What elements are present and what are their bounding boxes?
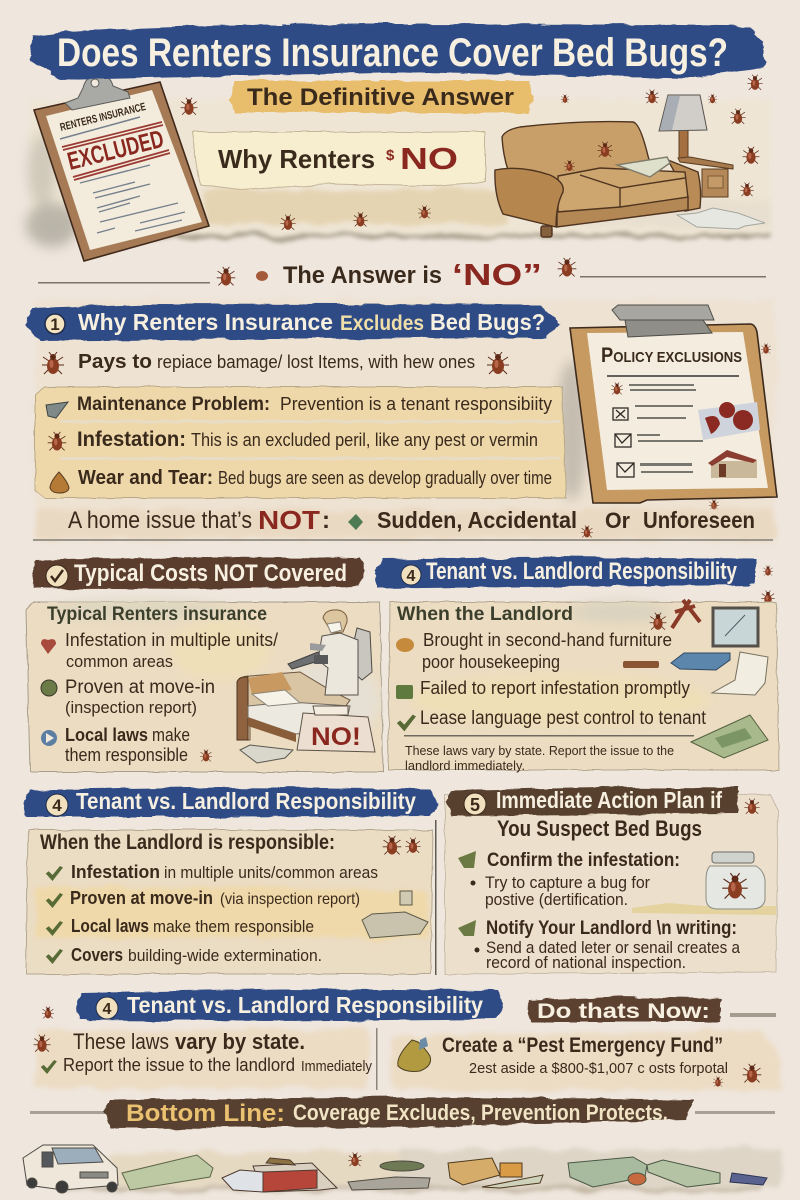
icon: tools — [348, 1161, 430, 1190]
highlight band — [36, 888, 428, 938]
illustration: bed — [237, 672, 350, 742]
banner: tenant vs landlord middle: Tenant vs. Landlord Responsibility — [76, 788, 416, 814]
banner: immediate action plan: 5 — [470, 795, 480, 815]
panel washes — [50, 601, 380, 740]
subtitle ribbon: The Definitive Answer — [247, 84, 514, 111]
section: typical costs not covered — [26, 557, 383, 772]
panel: when the landlord is responsible — [26, 830, 433, 974]
banner: immediate action plan: Immediate Action Plan if — [496, 787, 722, 813]
grey wall stain — [26, 134, 78, 247]
icon: van — [23, 1145, 118, 1193]
panel: state laws: Report the issue to the landlord — [63, 1055, 295, 1075]
section 5: immediate action plan — [445, 787, 778, 974]
item: second-hand furniture: Brought in second-hand furniture — [423, 630, 672, 650]
panel: pest emergency fund: 2est aside a $800-$1,007 c osts forpotal — [469, 1060, 728, 1077]
panel heading: When the Landlord is responsible: — [40, 831, 335, 854]
not sudden row: A home issue that’s — [68, 507, 252, 534]
panel: typical renters insurance: Typical Renters insurance — [47, 604, 267, 625]
row: infestation: This is an excluded peril, like any pest or vermin — [191, 430, 538, 450]
item: multiple units: common areas — [66, 652, 173, 671]
illustration: crumpled cloth — [677, 208, 765, 229]
banner: typical costs: Typical Costs NOT Covered — [74, 560, 347, 587]
exclusion reasons panel — [35, 387, 566, 498]
icon: tools and bug — [650, 600, 700, 630]
step: notify: record of national inspection. — [486, 953, 686, 972]
clipboard: excluded: EXCLUDED — [65, 125, 167, 176]
strip wash — [60, 1150, 780, 1191]
row: maintenance problem: Prevention is a tenant responsibiity — [280, 394, 552, 414]
banner: why renters: $ — [386, 147, 395, 164]
panel: state laws: vary by state. — [175, 1029, 305, 1054]
not sudden row: Unforeseen — [643, 507, 755, 533]
item: local laws: Local laws — [65, 725, 148, 745]
illustration: jar with bug — [632, 852, 776, 915]
item: second-hand furniture — [396, 630, 672, 672]
banner: tenant vs landlord top: 4 — [407, 568, 416, 585]
section: tenant vs landlord, when landlord responsible — [23, 787, 438, 975]
banner: why renters: NO — [400, 141, 458, 176]
item: local laws: Local laws — [71, 916, 149, 936]
panel: state laws — [34, 1029, 372, 1088]
icon: money bag — [398, 1037, 431, 1071]
item: covers: Covers — [71, 945, 123, 965]
panel: when the landlord: When the Landlord — [397, 604, 573, 625]
banner: immediate action plan — [447, 787, 738, 816]
illustration: sofa — [495, 122, 701, 237]
wall wash — [30, 100, 770, 236]
icon: money stack — [691, 715, 768, 758]
item: local laws: make them responsible — [153, 917, 314, 936]
icon: framed picture — [713, 608, 758, 646]
icon: boxes — [448, 1158, 543, 1188]
item: proven at move-in: Proven at move-in — [70, 888, 213, 908]
section 1: why renters insurance excludes bed bugs — [25, 300, 777, 541]
bottom line banner: Coverage Excludes, Prevention Protects. — [293, 1100, 668, 1125]
illustration: exterminator — [288, 610, 372, 695]
row: wear and tear: Wear and Tear: — [78, 467, 213, 489]
banner: do thats now — [527, 997, 776, 1023]
floor strokes — [90, 190, 770, 238]
pays to row — [42, 351, 509, 374]
row: wear and tear — [50, 467, 552, 493]
banner: tenant vs landlord top — [375, 557, 755, 589]
not sudden row: : — [322, 507, 330, 534]
row: infestation — [48, 428, 538, 451]
item: local laws: make — [152, 725, 190, 745]
panel: pest emergency fund: Create a “Pest Emergency Fund” — [442, 1034, 723, 1057]
section: tenant vs landlord top — [375, 557, 779, 773]
step: notify: Notify Your Landlord \n writing: — [486, 918, 737, 939]
answer heading: The Answer is — [283, 262, 442, 289]
subtitle ribbon — [229, 81, 534, 113]
not sudden row: NOT — [258, 505, 320, 535]
banner: why renters: Why Renters — [218, 144, 375, 174]
house sticker — [708, 450, 757, 478]
item: infestation: in multiple units/common areas — [164, 863, 378, 882]
item: local laws — [46, 912, 428, 938]
clipboard: policy exclusions: POLICY EXCLUSIONS — [601, 344, 742, 367]
item: proven at move-in: (via inspection report) — [220, 891, 360, 908]
row separators — [60, 420, 560, 460]
section 1 banner: Excludes — [340, 312, 424, 335]
answer heading: ‘NO” — [452, 257, 542, 292]
item: multiple units — [41, 630, 278, 671]
row: maintenance problem: Maintenance Problem: — [77, 394, 270, 415]
bottom line banner — [30, 1097, 775, 1128]
pays to row: repiace bamage/ lost Items, with hew ones — [157, 352, 475, 372]
step: notify: Send a dated leter or senail creates a — [486, 938, 740, 957]
answer heading — [38, 257, 766, 292]
item: local laws: them responsible — [65, 745, 188, 765]
icon: red kit and glove — [222, 1158, 337, 1192]
icon: phone — [623, 653, 730, 670]
clipboard: excluded: RENTERS INSURANCE — [59, 101, 147, 134]
section 1 banner: Why Renters Insurance — [78, 309, 333, 335]
panel washes — [410, 602, 710, 725]
panel: when the landlord — [388, 600, 779, 773]
step: confirm: Confirm the infestation: — [487, 850, 680, 871]
section 1 banner: 1 — [50, 315, 60, 334]
not sudden row: Sudden, Accidental — [377, 507, 577, 533]
bed bugs scattered — [181, 75, 763, 230]
panel: action plan — [445, 787, 778, 974]
note: laws vary: landlord immediately. — [405, 758, 525, 773]
grey stain behind clipboard — [556, 360, 588, 500]
banner: tenant vs landlord middle: 4 — [52, 796, 62, 815]
row: infestation: Infestation: — [77, 428, 186, 451]
step: confirm: Try to capture a bug for — [485, 873, 650, 892]
banner: tenant vs landlord lower: 4 — [103, 1001, 112, 1018]
section wash — [35, 300, 775, 540]
banner: why renters — [192, 132, 485, 190]
step: notify — [458, 918, 740, 972]
icon: blue container — [730, 1173, 767, 1185]
hero illustration panel — [26, 75, 770, 261]
item: covers: building-wide extermination. — [128, 946, 322, 965]
not sudden row — [33, 505, 774, 541]
icon: cash bundles — [568, 1157, 720, 1187]
section 1 banner: Bed Bugs? — [430, 309, 545, 335]
item: proven at move-in: (inspection report) — [65, 698, 197, 717]
section 1 banner — [25, 304, 560, 341]
item: local laws — [41, 725, 212, 765]
item: lease language: Lease language pest control to tenant — [420, 708, 707, 729]
clipboard: policy exclusions — [570, 305, 777, 503]
pays to row: Pays to — [78, 351, 152, 373]
panel: typical renters insurance — [26, 601, 383, 772]
step: confirm: postive (dertification. — [485, 890, 628, 909]
row: wear and tear: Bed bugs are seen as develop gradually over time — [218, 468, 552, 488]
item: proven at move-in — [41, 677, 215, 717]
bottom line banner: Bottom Line: — [126, 1100, 285, 1127]
not sudden row: Or — [605, 508, 630, 533]
step: confirm — [458, 850, 680, 909]
note: laws vary — [405, 743, 674, 773]
item: covers — [46, 945, 322, 965]
section: state laws and emergency fund — [34, 989, 782, 1090]
item: second-hand furniture: poor housekeeping — [422, 652, 560, 672]
banner: typical costs — [32, 557, 365, 589]
panel: state laws: Immediately — [301, 1058, 372, 1075]
sub heading: You Suspect Bed Bugs — [497, 816, 702, 841]
item: proven at move-in: Proven at move-in — [65, 677, 215, 698]
item: proven at move-in — [46, 888, 412, 908]
illustration: no bag: NO! — [311, 723, 361, 751]
illustration: no bag — [297, 706, 375, 752]
clipboard: excluded — [34, 75, 209, 261]
bottom illustration strip — [23, 1145, 780, 1193]
row: maintenance problem — [46, 394, 552, 418]
illustration: booklet — [240, 745, 293, 763]
item: failed to report: Failed to report infestation promptly — [420, 678, 690, 698]
panel: state laws: These laws — [73, 1029, 169, 1054]
note: laws vary: These laws vary by state. Report the issue to the — [405, 743, 674, 758]
item: multiple units: Infestation in multiple units/ — [65, 630, 278, 650]
item: infestation: Infestation — [71, 862, 160, 882]
illustration: lamp and side table — [659, 95, 733, 197]
banner: do thats now: Do thats Now: — [537, 1000, 710, 1023]
item: infestation — [46, 862, 378, 882]
panel: pest emergency fund — [390, 1030, 782, 1090]
icon: receipt — [712, 652, 768, 695]
hearts sticker — [698, 402, 760, 440]
icon: cash — [122, 1155, 213, 1190]
banner: tenant vs landlord lower: Tenant vs. Landlord Responsibility — [127, 992, 483, 1018]
